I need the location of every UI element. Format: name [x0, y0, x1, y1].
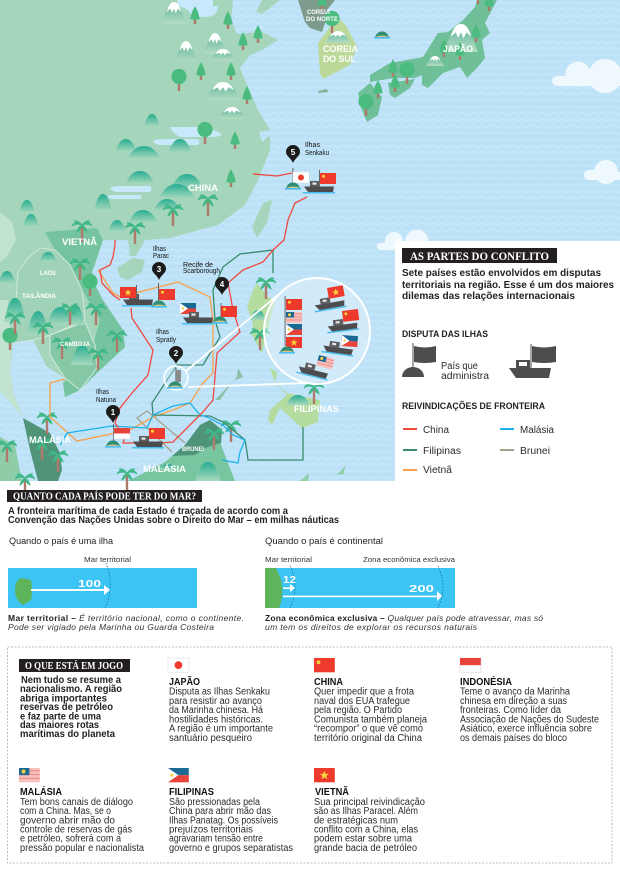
boundary line: China	[100, 173, 307, 443]
panel: quanto cada país pode ter do mar	[7, 490, 543, 632]
entry: Vietnã: grande bacia de petróleo	[314, 843, 417, 854]
entry: Vietnã: conflito com a China, elas	[314, 824, 418, 836]
caption: zona econômica exclusiva: Zona econômica exclusiva – Qualquer país pode atravessar, mas só	[265, 613, 543, 623]
entry: Indonésia: chinesa em direção a suas	[460, 696, 567, 707]
diagram: continent: Mar territorial	[265, 555, 312, 564]
entry: China: CHINA	[314, 677, 343, 688]
land: Borneo	[128, 420, 235, 481]
intro text: e faz parte de uma	[20, 712, 101, 722]
land: China and mainland Asia	[0, 0, 278, 417]
entry: Filipinas	[168, 768, 293, 854]
entry: Vietnã: são as Ilhas Paracel. Além	[314, 806, 418, 817]
entry: Vietnã: Sua principal reivindicação	[314, 797, 425, 808]
land: Laos and Thailand	[13, 248, 85, 343]
country names: FILIPINAS	[294, 404, 339, 415]
intro text: Sete países estão envolvidos em disputas	[402, 268, 601, 279]
entry: Malásia: controle de reservas de gás	[20, 824, 132, 836]
country names	[22, 9, 473, 475]
entry: Filipinas: prejuízos territoriais	[169, 824, 253, 836]
entry: Malásia: governo abrir mão do	[20, 816, 115, 826]
entry: Indonésia: Associação de Nações do Sudeste	[460, 714, 599, 726]
legend: border claims: Vietnã	[423, 465, 452, 476]
caption: zona econômica exclusiva	[265, 613, 543, 632]
entry: Japão: JAPÃO	[169, 675, 200, 688]
land: Luzon	[247, 283, 275, 353]
land: South Korea	[318, 17, 357, 79]
entry: China: naval dos EUA trafegue	[314, 696, 410, 707]
land: Shikoku	[388, 79, 415, 98]
callout lines to the Spratly detail	[186, 295, 310, 387]
intro text: reservas de petróleo	[20, 702, 113, 713]
land: Visayas and Mindanao	[268, 368, 320, 428]
intro text: abriga importantes	[20, 694, 107, 704]
Philippine boat and Scarborough flag	[180, 303, 237, 324]
entry: China: “recompor” o que vê como	[314, 724, 423, 734]
intro text: Nem tudo se resume a	[21, 675, 121, 686]
island names: Ilhas	[305, 142, 320, 149]
panel: as partes do conflito	[395, 241, 620, 481]
caption: mar territorial: Mar territorial – É território nacional, como o continente.	[8, 613, 244, 623]
diagram: island: Mar territorial	[84, 555, 131, 564]
pin 2	[169, 346, 183, 364]
entry: Malásia: MALÁSIA	[20, 785, 62, 798]
white clouds	[377, 59, 620, 252]
entry: China	[314, 658, 427, 744]
legend: border claims: China	[423, 425, 449, 436]
country names: MALÁSIA	[143, 464, 186, 475]
entry: Filipinas: São pressionadas pela	[169, 797, 260, 808]
diagram: continent: Zona econômica exclusiva	[363, 555, 456, 564]
country names: BRUNEI	[182, 446, 204, 453]
caption: zona econômica exclusiva: um tem os direitos de explorar os recursos naturais	[265, 622, 478, 632]
entry: China: pela região. O Partido	[314, 705, 402, 716]
pin 1: 1	[111, 408, 116, 417]
island names: Natuna	[96, 397, 116, 404]
land: Sarawak and Sabah	[172, 420, 222, 456]
boundary line: Malaysia	[60, 403, 245, 463]
small islands of the Sea of Japan	[318, 32, 390, 93]
Paracel islands: flags, island, boat	[120, 283, 175, 308]
Natuna islands: flags, island, boat	[105, 424, 165, 448]
country names: DO SUL	[323, 54, 356, 65]
heading: AS PARTES DO CONFLITO	[410, 251, 549, 263]
country names: LAOS	[40, 270, 57, 277]
diagram: continent: Quando o país é continental	[265, 536, 383, 546]
Senkaku islands: flags, island, boat	[285, 168, 336, 194]
land: small islands	[300, 464, 346, 481]
island names	[96, 142, 329, 404]
label: país que administra: administra	[441, 371, 489, 382]
entry: Vietnã: VIETNÃ	[315, 785, 349, 798]
intro text: territoriais na região. Esse é um dos maiores	[402, 280, 614, 291]
island names: Recife de	[183, 262, 213, 269]
entry: Filipinas: China para abrir mão das	[169, 806, 271, 817]
pin 4: 4	[220, 280, 225, 289]
intro text: Convenção das Nações Unidas sobre o Direito do Mar – em milhas náuticas	[8, 515, 339, 526]
diagram: continent	[265, 536, 456, 608]
country names: MALÁSIA	[29, 435, 71, 446]
country names: COREIA	[307, 9, 330, 16]
label: país que administra: País que	[441, 361, 478, 372]
pin 5: 5	[291, 148, 296, 157]
country names: COREIA	[323, 44, 358, 55]
country names: VIETNÃ	[62, 237, 97, 248]
legend: border claims: Malásia	[520, 425, 554, 436]
hills	[0, 114, 310, 481]
land: Hainan	[117, 258, 145, 280]
land: Taiwan	[252, 200, 272, 238]
round trees	[2, 11, 415, 350]
entry: Indonésia: INDONÉSIA	[460, 675, 512, 688]
island names: Senkaku	[305, 150, 329, 157]
pin 1	[106, 405, 120, 423]
intro text: marítimas do planeta	[20, 729, 115, 740]
land: Palawan	[215, 368, 243, 400]
palm trees	[0, 195, 324, 495]
intro text: das maiores rotas	[20, 720, 99, 731]
entry: Filipinas: governo e grupos separatistas	[169, 843, 293, 854]
entry: Malásia: com a China. Mas, se o	[20, 806, 111, 817]
entry: Indonésia	[460, 658, 599, 744]
pin 3	[152, 262, 166, 280]
entry: Indonésia: fronteiras. Como líder da	[460, 705, 561, 716]
icon: island with flag	[402, 343, 436, 377]
caption: mar territorial	[8, 613, 244, 632]
intro text	[402, 268, 614, 302]
entry: China: território original da China	[314, 733, 422, 744]
diagram: island: Quando o país é uma ilha	[9, 536, 113, 546]
map: South China Sea region	[0, 0, 620, 495]
land: Sumatra	[0, 437, 22, 481]
entry: Japão	[168, 658, 273, 744]
entry: Malásia: Tem bons canais de diálogo	[20, 797, 133, 808]
country names: DO NORTE	[306, 16, 339, 23]
entry: Malásia: e petróleo, sofrerá com a	[20, 834, 121, 844]
intro text	[8, 506, 339, 526]
island names: Ilhas	[156, 329, 169, 336]
icon: boat with flag	[509, 344, 556, 378]
land: Japan	[370, 0, 497, 88]
land: Cambodia	[50, 322, 97, 390]
legend: border claims: Brunei	[520, 446, 550, 457]
pin 2: 2	[174, 349, 179, 358]
diagram: continent: 12	[283, 574, 296, 586]
marker: Spratly small circle	[164, 366, 188, 390]
detail circle: Spratly claimants	[264, 278, 370, 384]
subheading: disputa das ilhas: DISPUTA DAS ILHAS	[402, 329, 488, 339]
intro text	[20, 675, 122, 740]
snowy mountains	[162, 2, 478, 119]
entry: Japão: A região é um importante	[169, 724, 273, 734]
entry: Vietnã	[314, 768, 425, 854]
entry: Japão: santuário pesqueiro	[169, 733, 252, 744]
legend: border claims: Filipinas	[423, 446, 461, 457]
entry: China: Quer impedir que a frota	[314, 686, 414, 698]
entry: Indonésia: Teme o avanço da Marinha	[460, 686, 570, 698]
country names: JAPÃO	[443, 44, 473, 55]
heading: O QUE ESTÁ EM JOGO	[25, 660, 123, 672]
lakes and low clouds	[107, 0, 222, 199]
country names: TAILÂNDIA	[22, 291, 56, 300]
entry: Malásia	[19, 768, 144, 854]
entry: Vietnã: podem estar sobre uma	[314, 834, 412, 844]
land: north-east coast	[256, 0, 280, 14]
pin 3: 3	[157, 265, 162, 274]
boundary line: Philippines	[152, 250, 303, 460]
entry: Indonésia: os demais países do bloco	[460, 733, 567, 744]
intro text: nacionalismo. A região	[20, 684, 122, 695]
island names: Parac	[153, 253, 169, 260]
pine trees	[190, 0, 494, 187]
diagram: island	[8, 536, 197, 608]
panel: o que está em jogo	[8, 647, 612, 863]
diagram: island: 100	[78, 578, 101, 590]
land: Kyushu	[358, 83, 382, 122]
entry: China: Comunista também planeja	[314, 714, 427, 726]
label: país que administra	[441, 361, 489, 382]
boundary line: Vietnam	[50, 270, 213, 441]
legend: border claims	[403, 425, 554, 476]
entry: Indonésia: Asiático, exerce influência sobre	[460, 724, 592, 734]
pin 5	[286, 145, 300, 163]
country names: CAMBOJA	[60, 341, 90, 348]
island names: Ilhas	[153, 246, 166, 253]
diagram: continent: 200	[409, 583, 434, 595]
caption: mar territorial: Pode ser vigiado pela Marinha ou Guarda Costeira	[8, 622, 214, 632]
land: North Korea	[298, 0, 335, 32]
heading: QUANTO CADA PAÍS PODE TER DO MAR?	[13, 490, 196, 502]
subheading: reivindicações de fronteira: REIVINDICAÇÕES DE FRONTEIRA	[402, 401, 545, 411]
entry: Filipinas: Ilhas Panatag. Os possíveis	[169, 816, 278, 826]
entry: Japão: da Marinha chinesa. Há	[169, 705, 263, 716]
intro text: dilemas das relações internacionais	[402, 291, 575, 302]
island names: Scarborough	[183, 268, 220, 275]
entry: Japão: para resistir ao avanço	[169, 696, 262, 707]
entry: Japão: Disputa as Ilhas Senkaku	[169, 686, 270, 698]
land: Malay peninsula	[23, 418, 62, 481]
entry: Filipinas: agravariam tensão entre	[169, 834, 263, 844]
island names: Spratly	[156, 337, 176, 344]
entry: Filipinas: FILIPINAS	[169, 787, 214, 798]
entry: Japão: hostilidades históricas.	[169, 714, 263, 726]
country names: CHINA	[188, 183, 218, 194]
entry: Vietnã: de estratégicas num	[314, 816, 398, 826]
land: Vietnam	[45, 228, 125, 397]
pin 4	[215, 277, 229, 295]
entry: Malásia: pressão popular e nacionalista	[20, 843, 144, 854]
boundary line: Brunei	[137, 411, 185, 452]
intro text: A fronteira marítima de cada Estado é traçada de acordo com a	[8, 506, 288, 517]
island names: Ilhas	[96, 389, 109, 396]
land: Myanmar area	[0, 212, 23, 417]
